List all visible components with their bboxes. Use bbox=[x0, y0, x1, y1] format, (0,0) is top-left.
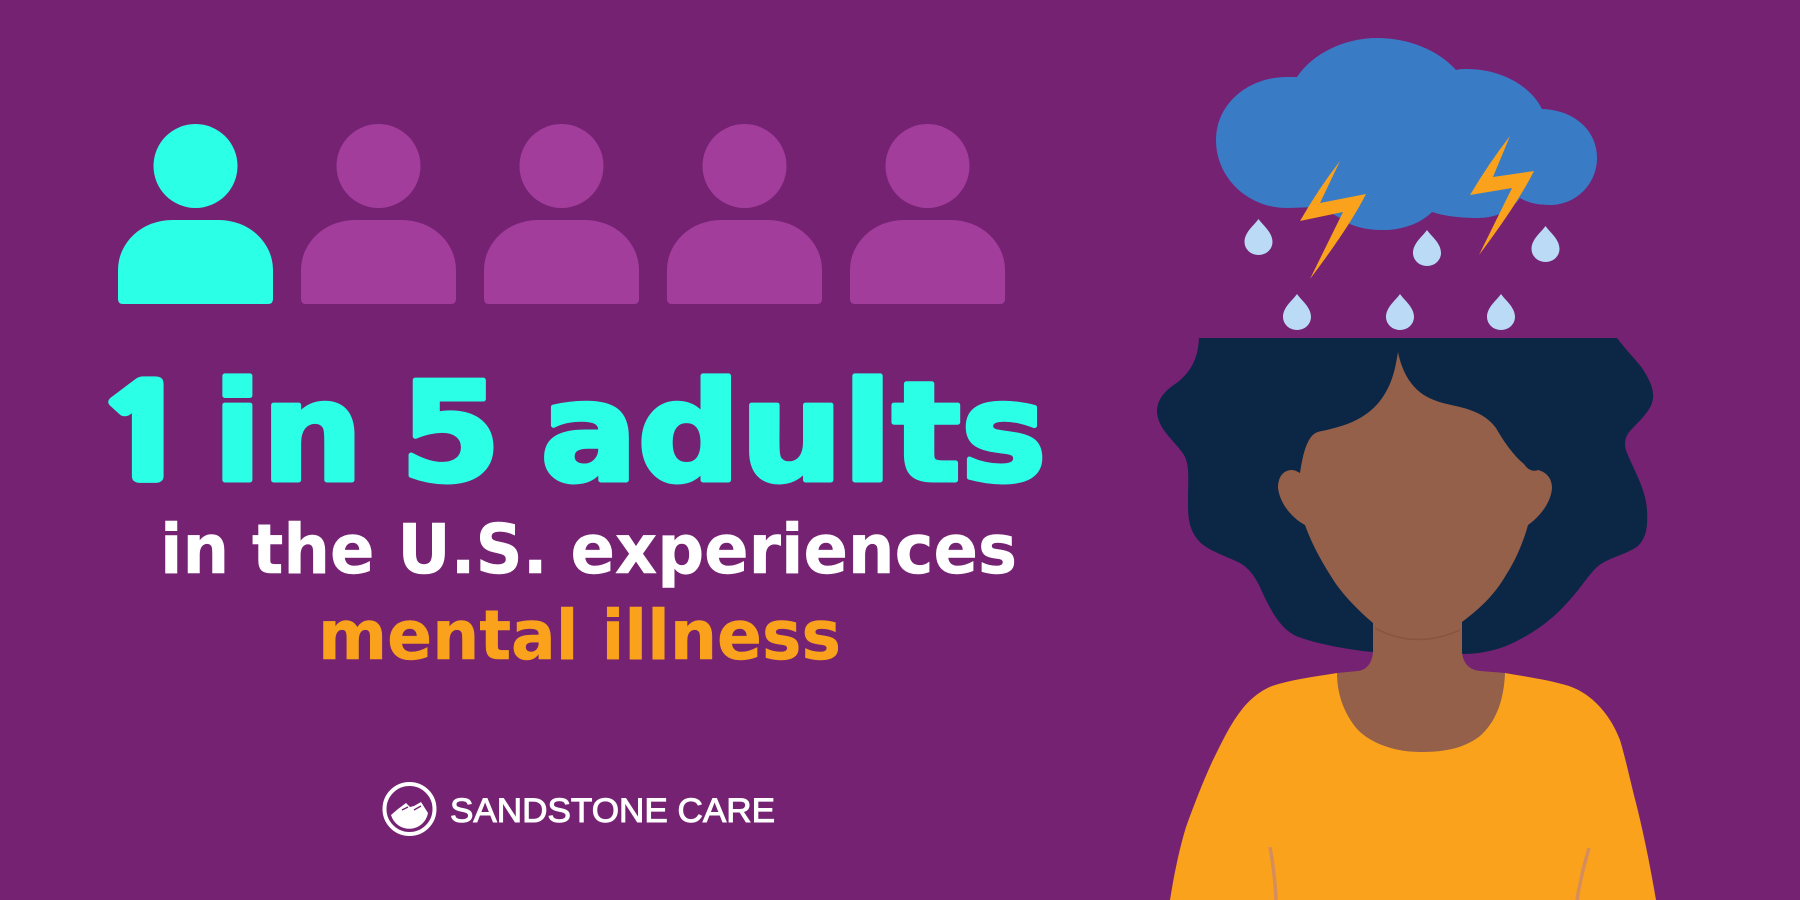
face and neck bbox=[1278, 352, 1552, 752]
icon: mountain emblem bbox=[384, 784, 434, 834]
subheading: in the U.S. experiences: in the U.S. experiences bbox=[160, 510, 1017, 590]
icon: lightning bolt right bbox=[1470, 136, 1534, 255]
icon: person 2 bbox=[301, 124, 456, 304]
icon: person 4 bbox=[667, 124, 822, 304]
icon: person 3 bbox=[484, 124, 639, 304]
shirt bbox=[1170, 673, 1656, 900]
row of five person icons bbox=[118, 124, 1005, 304]
heading: 1 in 5 adults bbox=[96, 354, 1046, 513]
hair bbox=[1157, 338, 1653, 654]
icon: cloud bbox=[1216, 38, 1597, 230]
heading: 1 in 5 adults: 1 bbox=[96, 370, 192, 498]
heading: 1 in 5 adults: 5 bbox=[400, 354, 501, 513]
heading: 1 in 5 adults: in bbox=[213, 354, 363, 513]
logo: Sandstone Care bbox=[384, 784, 775, 834]
icon: rain drops bbox=[1244, 219, 1560, 330]
chin shadow bbox=[1375, 628, 1460, 640]
arm creases bbox=[1270, 847, 1589, 900]
icon: lightning bolt left bbox=[1300, 161, 1366, 279]
subheading: mental illness: mental illness bbox=[318, 596, 841, 676]
icon: person 5 bbox=[850, 124, 1005, 304]
logo wordmark: SANDSTONE CARE bbox=[450, 792, 775, 830]
icon: highlighted person bbox=[118, 124, 273, 304]
illustration: storm cloud over woman bbox=[1157, 38, 1656, 900]
heading: 1 in 5 adults: adults bbox=[540, 354, 1046, 513]
